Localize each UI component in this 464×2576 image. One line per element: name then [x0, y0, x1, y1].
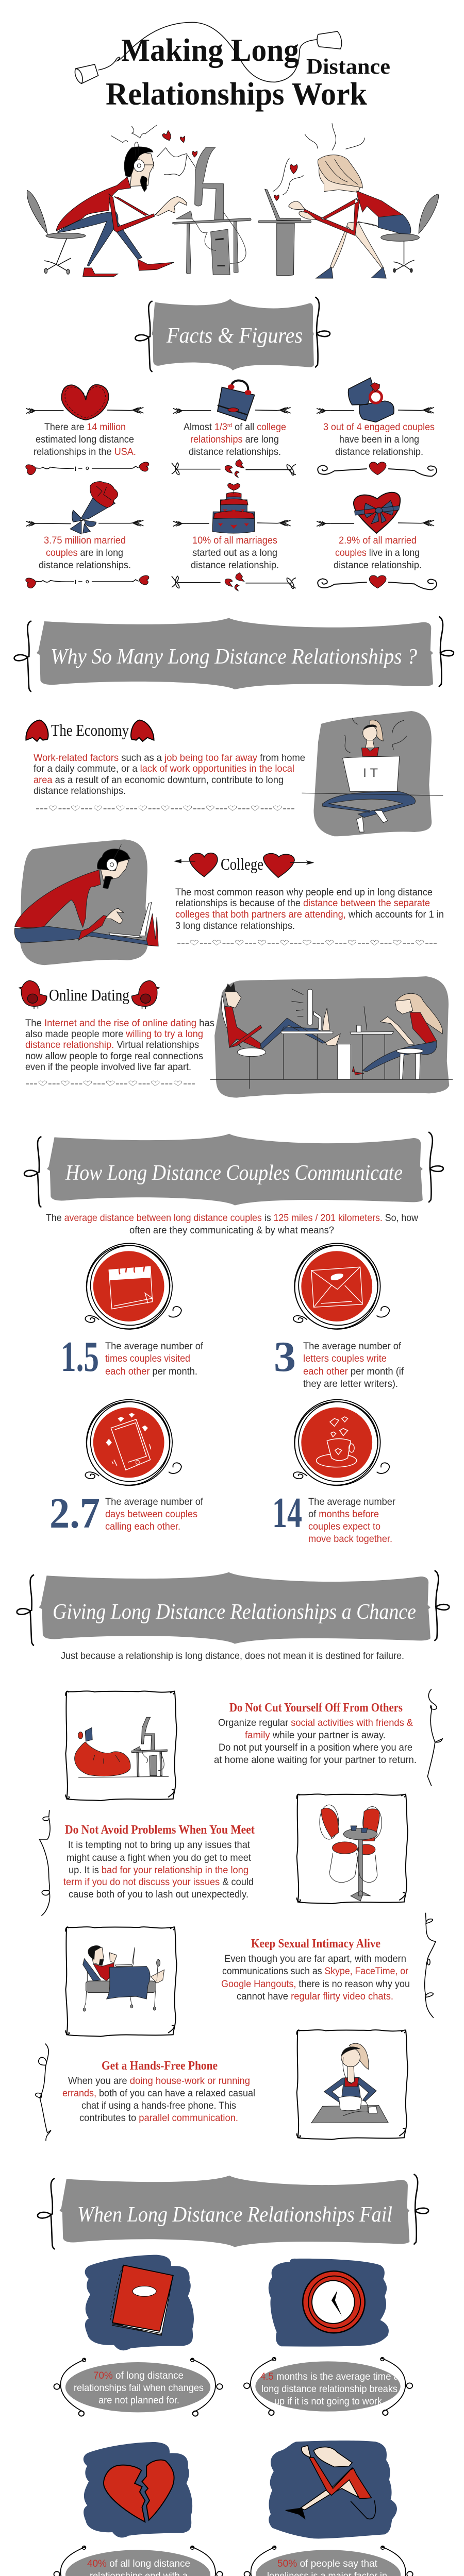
intro text: average distance: The average distance between long distance couples is 125 miles / 201 kilometers. So, how [46, 1213, 418, 1224]
economy paragraph [34, 753, 305, 796]
framed illustration: cafe chairs and table [297, 1794, 408, 1904]
heading: college with hearts [175, 853, 313, 877]
fact text: distance relationships. [189, 447, 281, 457]
tip text [62, 2076, 255, 2124]
stat text: days between couples [105, 1509, 197, 1520]
tin can telephone string [75, 22, 342, 83]
tip text [221, 1954, 410, 2002]
fact text: Almost 1/3 [184, 422, 228, 433]
fact text: distance relationships. [39, 560, 131, 571]
tip text: contributes to parallel communication. [79, 2113, 238, 2124]
fact text: of all [232, 422, 257, 433]
stat text: The average number of [105, 1341, 204, 1352]
panel: letters stat [274, 1243, 404, 1389]
big number 3: 3 [274, 1333, 296, 1381]
callout oval: 4.5 months is the average time a [260, 2371, 399, 2382]
fact text: started out as a long [192, 548, 277, 558]
decorative swirl line [427, 1689, 442, 1786]
banner: when relationships fail [38, 2174, 428, 2249]
panel: fact 2.9 percent [317, 493, 434, 571]
callout oval: long distance relationship breaks [261, 2384, 397, 2395]
callout oval: relationships fail when changes [74, 2383, 204, 2394]
stat text [105, 1341, 204, 1377]
fact text [191, 535, 279, 571]
icon: envelope [293, 1243, 389, 1329]
tip text: cause both of you to lash out unexpectedly. [69, 1889, 248, 1900]
college paragraph: The most common reason why people end up in long distance [175, 887, 433, 898]
icon: wedding cake [173, 483, 291, 533]
fact text: 3.75 million married [44, 535, 126, 546]
stat text: they are letter writers). [303, 1379, 398, 1389]
stat text [303, 1341, 404, 1389]
fact text: 2.9% of all married [339, 535, 417, 546]
banner: facts and figures: Facts & Figures [166, 324, 303, 348]
economy paragraph: distance relationships. [34, 786, 126, 796]
banner: how couples communicate [24, 1132, 443, 1207]
tip text: Do not put yourself in a position where you are [219, 1742, 412, 1753]
callout oval [244, 2358, 412, 2415]
banner: giving a chance [17, 1570, 449, 1646]
hero illustration: couple at computers [27, 123, 439, 278]
tip text: up. It is bad for your relationship in the long [69, 1865, 248, 1876]
icon: calendar [85, 1243, 181, 1329]
icon: heart [26, 385, 143, 420]
title line 1: Making Long [121, 33, 299, 68]
panel: 70 percent [54, 2255, 223, 2416]
callout oval: 70% of long distance [93, 2370, 184, 2381]
college paragraph: relationships is because of the distance between the separate [175, 898, 430, 909]
heading: online dating with birds: Online Dating [49, 986, 129, 1004]
title line 2: Relationships Work [106, 77, 367, 112]
tip text: Even though you are far apart, with modern [224, 1954, 406, 1964]
stat text [105, 1497, 204, 1532]
icon: coffee cup with hearts [293, 1400, 389, 1485]
stat text: move back together. [308, 1534, 392, 1545]
tip heading: Do Not Cut Yourself Off From Others [229, 1701, 403, 1715]
panel: months stat [272, 1400, 396, 1545]
tip text: cannot have regular flirty video chats. [237, 1991, 393, 2002]
stat text: letters couples write [303, 1353, 387, 1364]
college paragraph: 3 long distance relationships. [175, 921, 295, 931]
heading: online dating with birds [19, 980, 159, 1009]
banner: giving a chance: Giving Long Distance Relationships a Chance [53, 1600, 416, 1624]
icon: phone with hearts [85, 1400, 181, 1485]
decorative swirl line [39, 1810, 50, 1916]
framed illustration: man in bed with laptop [65, 1927, 177, 2037]
callout oval [244, 2546, 413, 2576]
callout oval [54, 2546, 223, 2576]
fact text [39, 535, 131, 571]
panel: 4.5 months [244, 2259, 412, 2415]
panel: do not cut yourself off [65, 1689, 442, 1801]
stat text: each other per month. [105, 1366, 197, 1377]
big number 1.5: 1.5 [61, 1333, 99, 1381]
economy paragraph: Work-related factors such as a job being too far away from home [34, 753, 305, 764]
icon: bouquet [26, 482, 143, 534]
icon: notebook [85, 2255, 194, 2350]
icon: heart gift box [317, 493, 434, 533]
illustration: woman with laptop [302, 711, 443, 836]
tip text: When you are doing house-work or running [68, 2076, 250, 2087]
fact text: distance relationship. [191, 560, 279, 571]
row two dividers [26, 573, 437, 591]
icon: broken heart [84, 2442, 192, 2538]
big number 2.7: 2.7 [49, 1489, 100, 1537]
tip text: communications such as Skype, FaceTime, or [222, 1966, 409, 1977]
panel: 40 percent [54, 2442, 223, 2576]
icon: clock [269, 2259, 389, 2347]
fact text [323, 422, 435, 457]
fact text: 10% of all marriages [192, 535, 277, 546]
college paragraph: colleges that both partners are attending, which accounts for 1 in [175, 909, 444, 920]
tip heading: Get a Hands-Free Phone [102, 2059, 218, 2073]
tip heading: Do Not Avoid Problems When You Meet [65, 1823, 255, 1837]
fact text [34, 422, 136, 457]
tip text: Google Hangouts, there is no reason why you [221, 1979, 410, 1990]
tip text: term if you do not discuss your issues & could [63, 1877, 254, 1888]
stat text: The average number [308, 1497, 396, 1507]
college paragraph [175, 887, 444, 931]
heart divider: ---♡---♡---♡---♡---♡---♡---♡---♡---♡---♡---♡--- [36, 805, 295, 813]
online dating paragraph: distance relationship. Virtual relationships [25, 1040, 199, 1050]
callout oval: 40% of all long distance [87, 2558, 190, 2569]
illustration: woman with laptop: I T [363, 766, 378, 780]
banner: how couples communicate: How Long Distance Couples Communicate [65, 1161, 403, 1185]
economy paragraph: area as a result of an economic downturn, contribute to long [34, 775, 284, 786]
tip text: at home alone waiting for your partner to return. [214, 1755, 417, 1766]
panel: college [14, 839, 444, 965]
economy paragraph: for a daily commute, or a lack of work opportunities in the local [34, 764, 294, 774]
fact text: couples are in long [46, 548, 123, 558]
fact text: rd [227, 422, 232, 429]
fact text [334, 535, 422, 571]
callout oval: are not planned for. [98, 2395, 179, 2406]
framed illustration: beanbag and computer [65, 1691, 177, 1801]
stat text: The average number of [303, 1341, 402, 1352]
tip text: errands, both of you can have a relaxed casual [62, 2088, 255, 2099]
icon: lonely woman [269, 2441, 397, 2538]
online dating paragraph: even if the people involved live far apart. [25, 1062, 191, 1073]
heading: the economy with wings: The Economy [51, 721, 129, 739]
panel: fact 3.75 million [26, 482, 143, 571]
callout oval [54, 2358, 223, 2416]
panel: fact 14 million [26, 385, 143, 457]
fact text [184, 422, 286, 457]
tip text: Organize regular social activities with friends & [218, 1718, 413, 1728]
stat text: calling each other. [105, 1521, 180, 1532]
stat text: The average number of [105, 1497, 204, 1507]
banner: facts and figures [135, 297, 330, 372]
online dating paragraph: also made people more willing to try a long [25, 1029, 203, 1040]
stat text: times couples visited [105, 1353, 190, 1364]
stat text: couples expect to [308, 1521, 380, 1532]
panel: fact 10 percent [173, 483, 291, 571]
panel: fact one third college [173, 381, 291, 457]
icon: ring box [317, 378, 434, 422]
fact text: 3 out of 4 engaged couples [323, 422, 435, 433]
row one dividers [26, 460, 437, 478]
decorative swirl line [425, 1913, 436, 2018]
callout oval: 50% of people say that [277, 2558, 378, 2569]
panel: calling stat [49, 1400, 204, 1537]
heading: the economy with wings [26, 720, 154, 741]
woman at laptop [258, 155, 439, 278]
monitor, desk and tower [172, 148, 251, 275]
panel: do not avoid problems [39, 1794, 408, 1916]
framed illustration: woman cooking with headset [297, 2030, 408, 2140]
title [75, 22, 390, 112]
heading: college with hearts: College [221, 855, 263, 873]
fact text: There are 14 million [44, 422, 126, 433]
tip text: might cause a fight when you do get to meet [67, 1853, 252, 1863]
fact text: have been in a long [339, 434, 419, 445]
fact text: couples live in a long [335, 548, 420, 558]
tip text: family while your partner is away. [245, 1730, 386, 1741]
fact text: relationships in the USA. [34, 447, 136, 457]
fact text: estimated long distance [36, 434, 134, 445]
banner: when relationships fail: When Long Distance Relationships Fail [77, 2203, 392, 2227]
intro text: average distance [46, 1213, 418, 1236]
panel: online dating [19, 976, 453, 1098]
banner: why so many: Why So Many Long Distance Relationships ? [51, 645, 417, 669]
fact text: college [257, 422, 286, 433]
heart divider: ---♡---♡---♡---♡---♡---♡---♡---♡---♡---♡---♡--- [177, 939, 437, 947]
panel: visits stat [61, 1243, 204, 1381]
decorative swirl line [36, 2044, 51, 2141]
man at desktop [27, 123, 364, 277]
banner: why so many [14, 617, 454, 692]
illustration: man with laptop [14, 839, 158, 965]
heart divider: ---♡---♡---♡---♡---♡---♡---♡--- [25, 1080, 195, 1088]
panel: hands free phone [36, 2030, 408, 2141]
title word distance: Distance [306, 55, 390, 79]
fact text: relationships are long [190, 434, 279, 445]
tip text: chat if using a hands-free phone. This [81, 2100, 236, 2111]
stat text: each other per month (if [303, 1366, 404, 1377]
fact text: distance relationship. [334, 560, 422, 571]
tip text [63, 1840, 254, 1900]
icon: purse [173, 381, 291, 421]
illustration: couple on video chat [210, 976, 453, 1098]
online dating paragraph: The Internet and the rise of online dating has [25, 1018, 214, 1029]
stat text: of months before [308, 1509, 379, 1520]
panel: the economy [26, 711, 443, 836]
tip text: It is tempting not to bring up any issues that [68, 1840, 251, 1851]
tip heading: Keep Sexual Intimacy Alive [251, 1937, 380, 1951]
panel: keep intimacy alive [65, 1913, 436, 2037]
callout oval: up if it is not going to work. [274, 2396, 385, 2407]
intro text: not destined for failure: Just because a relationship is long distance, does not mean it is destined for failure. [61, 1651, 404, 1662]
intro text: average distance: often are they communicating & by what means? [129, 1225, 334, 1236]
fact text: distance relationship. [335, 447, 423, 457]
online dating paragraph: now allow people to forge real connections [25, 1051, 203, 1062]
big number 14: 14 [272, 1489, 302, 1537]
online dating paragraph [25, 1018, 214, 1073]
tip text [214, 1718, 417, 1766]
panel: fact three out of four [317, 378, 435, 457]
stat text [308, 1497, 396, 1545]
panel: 50 percent [244, 2441, 413, 2576]
